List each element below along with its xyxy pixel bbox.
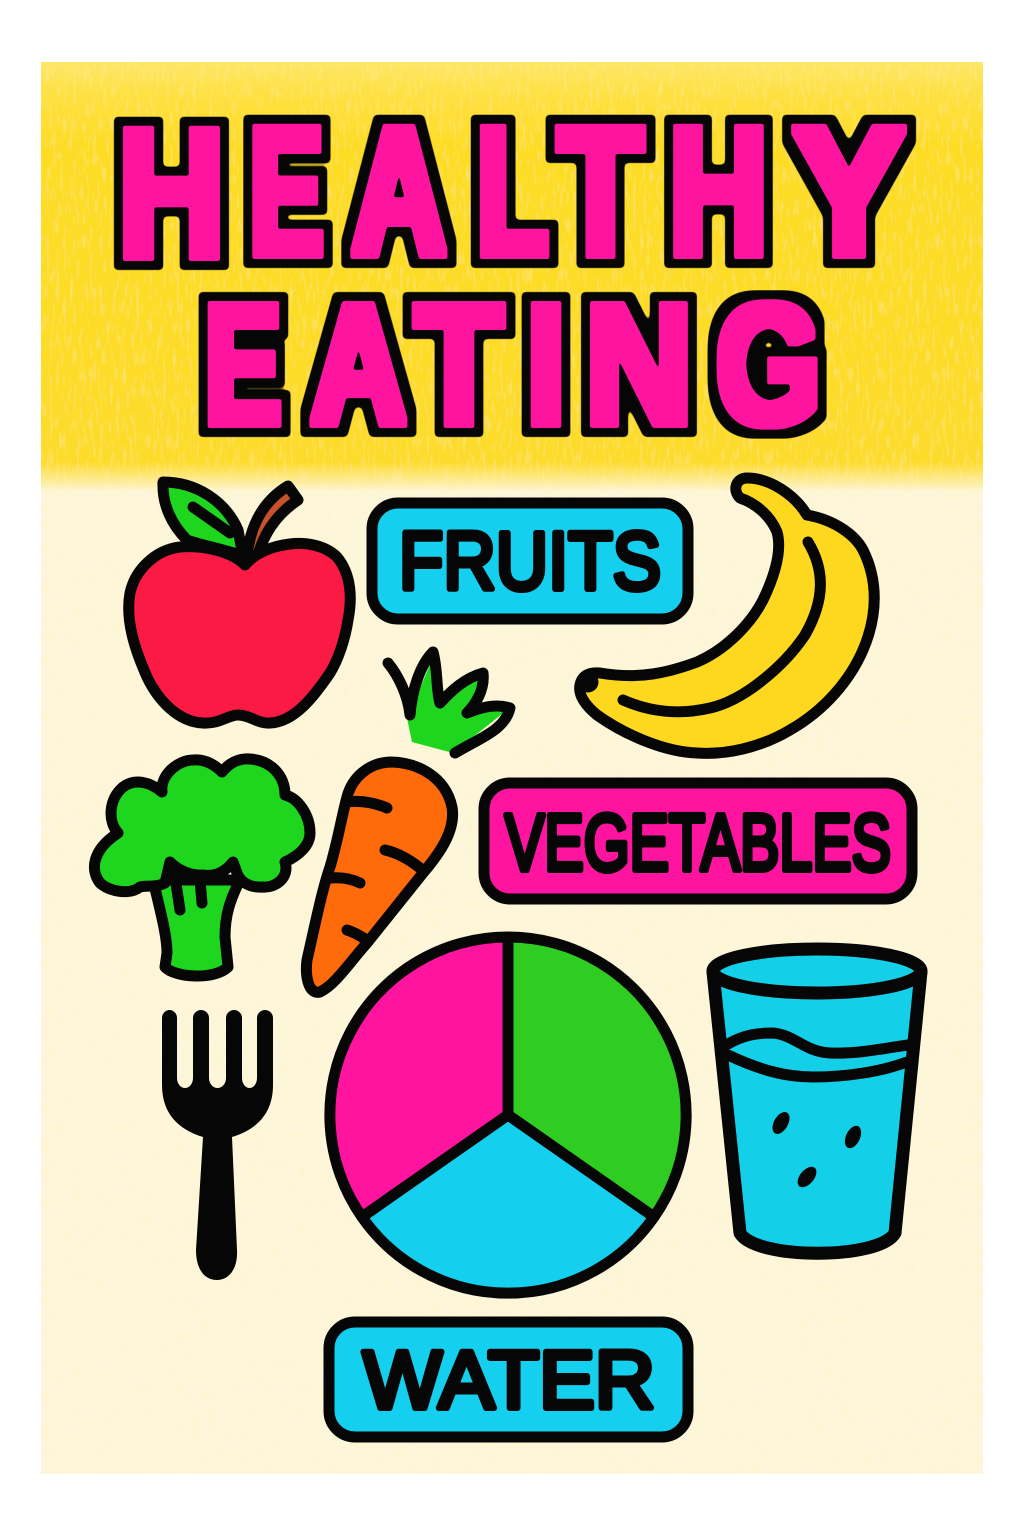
title: A [352, 89, 446, 293]
panel: yellow title band [41, 62, 983, 492]
label: water: WATER [363, 1335, 655, 1426]
title: H [669, 89, 768, 293]
title: N [585, 270, 693, 460]
icon: carrot leaves [388, 652, 510, 753]
icon: banana [580, 478, 874, 753]
icon: broccoli [94, 759, 310, 976]
label: fruits: FRUITS [399, 516, 661, 607]
title [118, 89, 905, 460]
title: T [558, 89, 643, 293]
label: water [329, 1322, 688, 1437]
icon: glass of water [713, 949, 921, 1253]
title: E [205, 270, 281, 460]
icon: fork [162, 1010, 273, 1280]
title: Y [793, 89, 905, 293]
title: A [311, 270, 406, 460]
icon: carrot [306, 762, 453, 992]
title: E [250, 89, 323, 293]
title: H [118, 91, 225, 295]
label: vegetables [484, 783, 912, 899]
title: G [716, 270, 821, 460]
icon: water bubbles [769, 1109, 864, 1191]
chart: plate pie [330, 937, 686, 1293]
title: I [526, 270, 566, 460]
title: T [415, 270, 503, 460]
icon: apple [129, 482, 350, 723]
title: L [477, 89, 548, 293]
label: vegetables: VEGETABLES [505, 798, 891, 887]
